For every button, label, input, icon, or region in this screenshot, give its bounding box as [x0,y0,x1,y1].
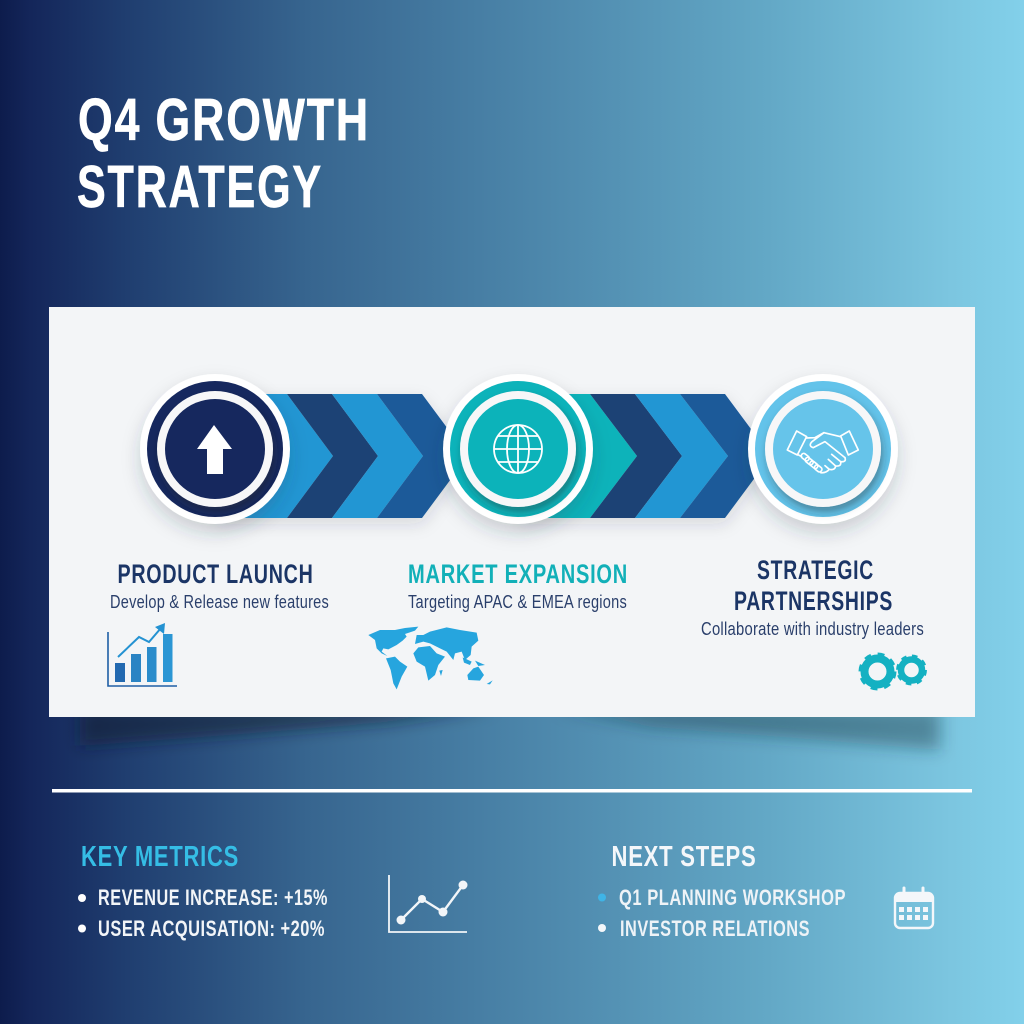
icon: bar chart [108,623,177,686]
icon: partnerships handshake circle [748,374,898,524]
icon: gears [861,655,925,688]
text block: product launch: PRODUCT LAUNCH [118,559,314,589]
text block: market expansion: Targeting APAC & EMEA regions [408,592,627,612]
card shadow [80,708,940,750]
title [77,87,370,220]
icon: product launch arrow circle [140,374,290,524]
divider [52,789,972,792]
text block: market expansion [408,559,628,612]
text block: next steps: Q1 PLANNING WORKSHOP [619,885,846,910]
text block: next steps: NEXT STEPS [612,841,756,873]
chevron band: step 1 to step 2 [215,394,468,518]
icon: calendar [895,888,933,928]
text block: product launch: Develop & Release new features [110,592,329,612]
text block: market expansion: MARKET EXPANSION [408,559,628,589]
title: Q4 GROWTH [78,87,370,153]
text block: key metrics [78,841,328,941]
text block: strategic partnerships: PARTNERSHIPS [734,586,893,616]
icon: line chart [389,875,468,932]
text block: key metrics: KEY METRICS [81,841,239,873]
icon: market expansion globe circle [443,374,593,524]
text block: next steps [598,841,846,941]
title: STRATEGY [77,154,323,220]
text block: strategic partnerships: Collaborate with industry leaders [701,619,924,639]
icon: world map [368,627,493,689]
panel: strategy roadmap [49,307,975,717]
chevron band: step 2 to step 3 [518,394,771,518]
text block: next steps: INVESTOR RELATIONS [620,916,810,941]
text block: strategic partnerships [701,555,924,639]
text block: product launch [110,559,329,612]
text block: key metrics: USER ACQUISATION: +20% [98,916,325,941]
text block: key metrics: REVENUE INCREASE: +15% [98,885,328,910]
text block: strategic partnerships: STRATEGIC [757,555,874,585]
